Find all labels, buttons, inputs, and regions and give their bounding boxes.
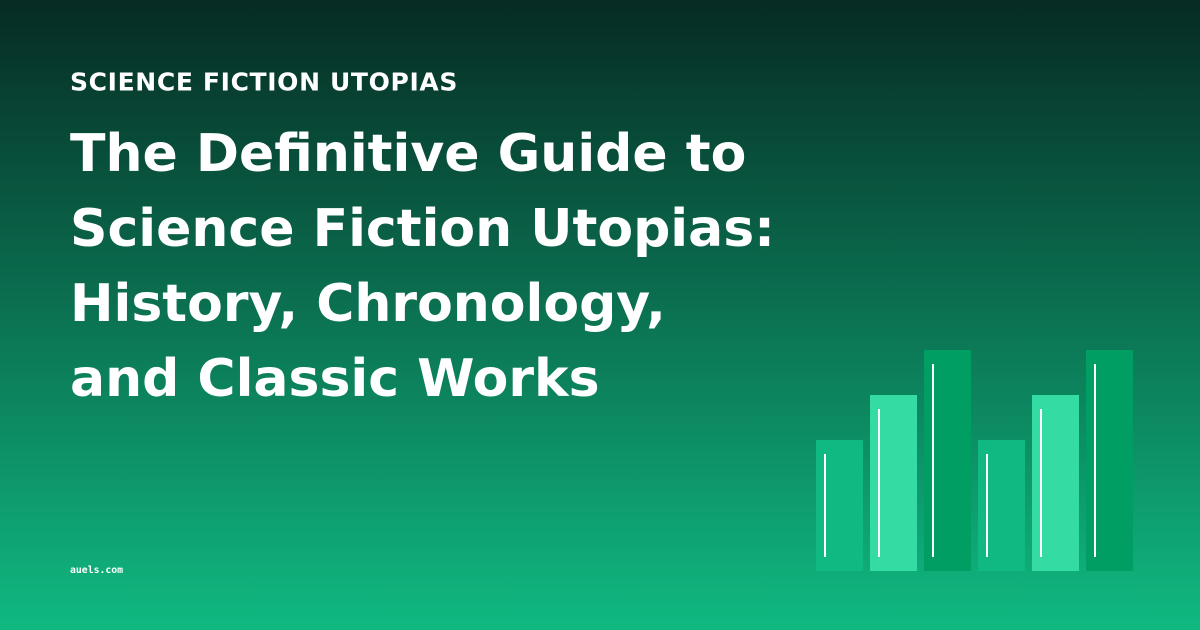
eyebrow heading: SCIENCE FICTION UTOPIAS: [70, 68, 458, 96]
title: Science Fiction Utopias:: [70, 199, 775, 259]
title: The Definitive Guide to: [70, 124, 746, 184]
bar chart illustration: [816, 350, 1133, 571]
title: and Classic Works: [70, 349, 600, 409]
title: [70, 124, 775, 409]
site label: auels.com: [70, 565, 123, 576]
title: History, Chronology,: [70, 274, 666, 334]
